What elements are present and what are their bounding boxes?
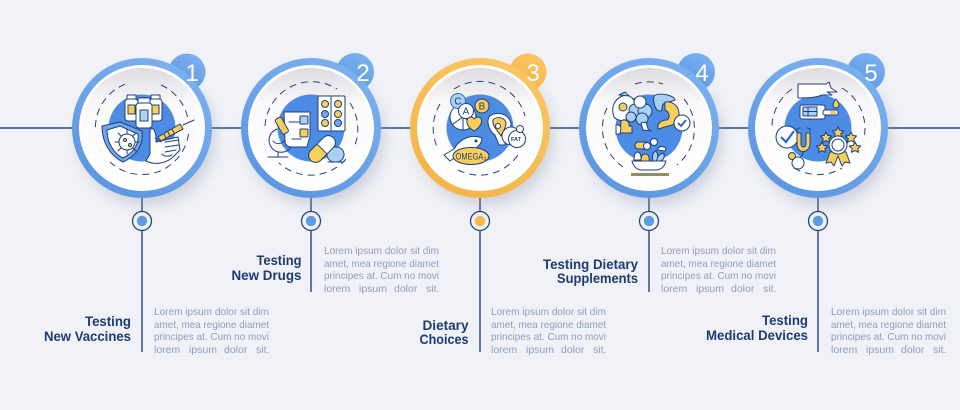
step 2: testing new drugs [232, 53, 439, 295]
text block 5: principes at. Cum no movi [831, 331, 946, 343]
icon: devices [772, 82, 865, 175]
text block 1: Lorem ipsum dolor sit dim [154, 306, 269, 318]
text block 3: principes at. Cum no movi [491, 331, 606, 343]
text block 5: sit. [933, 344, 946, 356]
heading 5: Medical Devices [706, 327, 808, 343]
heading 2: Testing [256, 252, 302, 268]
icon: diet: A [463, 106, 470, 118]
connector line 3 [479, 198, 481, 352]
text block 3 [491, 306, 606, 356]
text block 4: amet, mea regione diamet [661, 258, 776, 270]
text block 4: ipsum [696, 283, 724, 295]
text block 2: principes at. Cum no movi [324, 270, 439, 282]
node 4 [640, 212, 658, 230]
icon: diet: B [479, 102, 486, 112]
heading 1: New Vaccines [44, 328, 131, 344]
text block 3: lorem [491, 344, 518, 356]
circle badge 4 [579, 53, 722, 205]
circle badge 5: 5 [864, 60, 878, 87]
heading 5: Testing [762, 312, 808, 328]
text block 3: dolor [561, 344, 585, 356]
heading 4 [543, 256, 638, 286]
heading 3: Choices [420, 331, 469, 347]
text block 4: Lorem ipsum dolor sit dim [661, 245, 776, 257]
text block 2: amet, mea regione diamet [324, 258, 439, 270]
text block 2: sit. [426, 283, 439, 295]
icon: diet: OMEGA₃ [456, 152, 487, 162]
heading 3: Dietary [422, 317, 469, 333]
heading 5 [706, 312, 808, 343]
heading 1: Testing [85, 313, 131, 329]
text block 1: dolor [224, 344, 248, 356]
text block 1: sit. [256, 344, 269, 356]
text block 4: lorem [661, 283, 688, 295]
heading 2 [232, 252, 302, 283]
heading 3 [420, 317, 469, 347]
text block 2: dolor [394, 283, 418, 295]
text block 3: Lorem ipsum dolor sit dim [491, 306, 606, 318]
text block 2: Lorem ipsum dolor sit dim [324, 245, 439, 257]
icon: diet: C [454, 96, 462, 108]
text block 1: principes at. Cum no movi [154, 331, 269, 343]
heading 1 [44, 313, 131, 344]
node 1 [132, 212, 152, 230]
step 5: testing medical devices [706, 53, 946, 356]
text block 4: principes at. Cum no movi [661, 270, 776, 282]
text block 2 [324, 245, 439, 295]
node 2 [302, 212, 320, 230]
step 1: testing new vaccines [44, 54, 269, 356]
connector line 5 [817, 198, 819, 352]
connector line 4 [648, 198, 650, 292]
text block 5: lorem [831, 344, 858, 356]
connector line 1 [141, 198, 143, 352]
heading 4: Supplements [557, 270, 638, 286]
node 5 [808, 212, 828, 230]
text block 4: dolor [731, 283, 755, 295]
circle badge 3 [410, 54, 553, 205]
icon: supplements [602, 82, 694, 176]
text block 5 [831, 306, 946, 356]
step 3: dietary choices [410, 54, 606, 356]
text block 5: amet, mea regione diamet [831, 319, 946, 331]
text block 3: ipsum [526, 344, 554, 356]
text block 2: lorem [324, 283, 351, 295]
icon: diet: FAT [511, 137, 522, 143]
text block 3: sit. [593, 344, 606, 356]
text block 1 [154, 306, 269, 356]
heading 4: Testing Dietary [543, 256, 638, 272]
circle badge 3: 3 [526, 60, 540, 87]
text block 5: dolor [901, 344, 925, 356]
node 3 [470, 212, 490, 230]
text block 4: sit. [763, 283, 776, 295]
text block 1: ipsum [189, 344, 217, 356]
icon: drugs [265, 82, 358, 175]
connector line 2 [310, 198, 312, 292]
text block 1: amet, mea regione diamet [154, 319, 269, 331]
text block 5: Lorem ipsum dolor sit dim [831, 306, 946, 318]
circle badge 2: 2 [356, 60, 370, 87]
heading 2: New Drugs [232, 267, 302, 283]
circle badge 2 [241, 53, 384, 205]
circle badge 1 [72, 54, 215, 205]
text block 5: ipsum [866, 344, 894, 356]
circle badge 1: 1 [185, 60, 199, 87]
text block 4 [661, 245, 776, 295]
step 4: testing dietary supplements [543, 53, 776, 295]
horizontal timeline [0, 127, 960, 129]
text block 2: ipsum [359, 283, 387, 295]
text block 3: amet, mea regione diamet [491, 319, 606, 331]
circle badge 5 [748, 53, 891, 205]
icon: diet [433, 81, 526, 175]
text block 1: lorem [154, 344, 181, 356]
circle badge 4: 4 [695, 60, 709, 87]
icon: vaccines [95, 84, 194, 175]
